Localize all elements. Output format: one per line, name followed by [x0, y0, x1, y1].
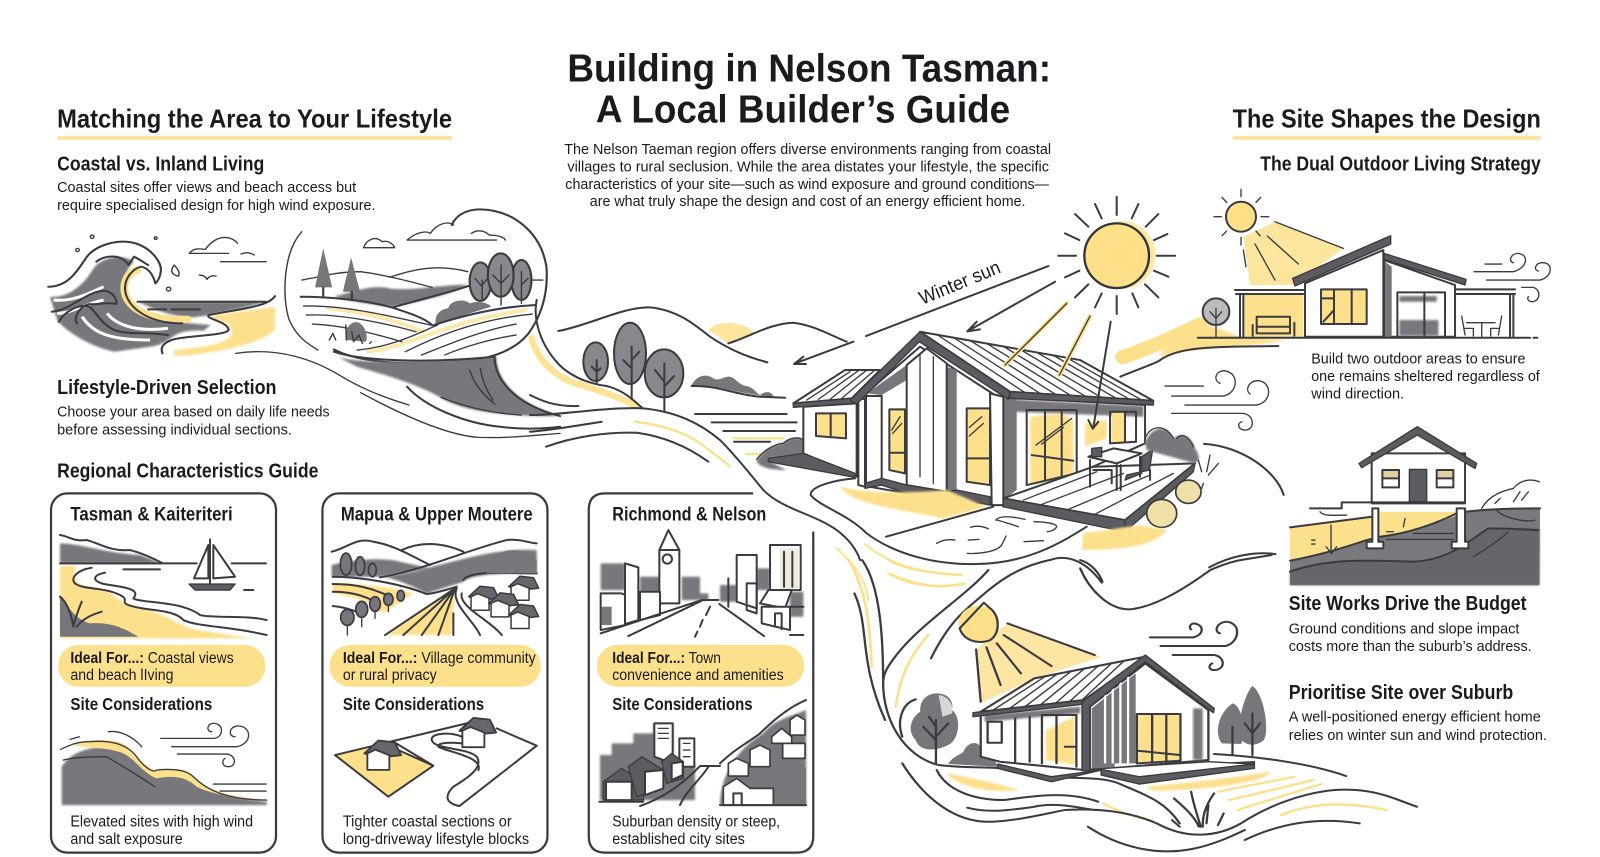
yellow band leading to dual outdoor house [1120, 325, 1284, 567]
text block: two outdoor areas: wind direction. [1310, 387, 1404, 403]
site considerations text: and salt exposure [70, 831, 183, 848]
winds near central house [1165, 371, 1269, 488]
ideal-for pill: Ideal For...: Village community [343, 650, 536, 667]
site considerations text: Elevated sites with high wind [70, 814, 253, 831]
ideal-for pill [58, 645, 265, 687]
panel: Richmond and Nelson card [589, 493, 813, 853]
text block: two outdoor areas [1310, 351, 1541, 403]
panel: Mapua and Upper Moutere card [322, 493, 547, 853]
intro text block: characteristics of your site—such as wind exposure and ground conditions— [565, 177, 1049, 193]
text block: two outdoor areas: one remains sheltered regardless of [1311, 369, 1541, 385]
site considerations text [343, 814, 529, 848]
text block: lifestyle-driven selection: before assessing individual sections. [57, 423, 292, 439]
text block: coastal vs inland: Coastal vs. Inland Living [57, 153, 264, 175]
ideal-for pill: and beach lIving [70, 667, 173, 684]
text block: prioritise site over suburb: A well-positioned energy efficient home [1289, 709, 1541, 725]
illustration: windy headland [61, 723, 267, 805]
inland hills circle [285, 209, 547, 363]
site considerations text [612, 814, 780, 848]
landscape flow lines [849, 560, 1417, 851]
sun and beam [959, 603, 1101, 703]
stilt house on sloping ground [1290, 427, 1540, 585]
subheading: dual outdoor living strategy: The Dual Outdoor Living Strategy [1260, 153, 1541, 175]
winds [1150, 622, 1237, 670]
heading: the site shapes the design: The Site Shapes the Design [1233, 106, 1541, 134]
site considerations heading: Site Considerations [612, 694, 753, 714]
illustrations: dual outdoor house and stilt house [1160, 189, 1550, 585]
illustration: lower house with sun, trees and landscape [849, 560, 1417, 851]
text block: prioritise site over suburb [1289, 682, 1547, 744]
illustration: central house with winter sun [768, 197, 1201, 532]
ideal-for pill: or rural privacy [343, 667, 437, 684]
title: Building in Nelson Tasman: [567, 48, 1051, 91]
text block: site works drive the budget: Ground conditions and slope impact [1289, 622, 1519, 638]
intro text block: The Nelson Taeman region offers diverse environments ranging from coastal [564, 142, 1051, 158]
right trees [1218, 686, 1266, 755]
text block: prioritise site over suburb: relies on winter sun and wind protection. [1289, 728, 1547, 744]
illustration: bay and sailboat [60, 535, 267, 638]
illustration: suburbs and hillside [599, 700, 806, 806]
ideal-for pill: convenience and amenities [612, 667, 784, 684]
wave [48, 235, 275, 356]
illustration: farmland and village [332, 540, 539, 635]
heading: matching the area: Matching the Area to Your Lifestyle [57, 106, 452, 134]
site considerations heading: Site Considerations [70, 694, 212, 714]
text block: lifestyle-driven selection: Lifestyle-Driven Selection [57, 377, 277, 399]
title [567, 48, 1051, 131]
illustration: section plans with driveway [335, 718, 537, 806]
title: A Local Builder’s Guide [596, 88, 1010, 131]
sun [1058, 197, 1175, 314]
front yard and path lines [811, 478, 1272, 600]
dual outdoor house [1160, 189, 1550, 360]
text block: site works drive the budget: Site Works Drive the Budget [1289, 593, 1527, 615]
panel: Tasman and Kaiteriteri card [51, 493, 276, 853]
text block: coastal vs inland: require specialised design for high wind exposure. [57, 198, 376, 214]
text block: two outdoor areas: Build two outdoor areas to ensure [1311, 351, 1526, 367]
heading: regional characteristics guide: Regional Characteristics Guide [57, 461, 318, 483]
deck [1003, 463, 1195, 532]
intro text block [564, 142, 1051, 210]
flowing landscape: hills, trees and river lines [530, 300, 860, 560]
left tree and shrub [900, 693, 998, 767]
site considerations heading: Site Considerations [343, 694, 484, 714]
card heading: Mapua & Upper Moutere [341, 503, 533, 525]
site considerations text [70, 814, 253, 848]
ideal-for pill: Ideal For...: Town [612, 650, 721, 667]
shrubs and rocks [1145, 428, 1201, 527]
house [768, 332, 1201, 532]
site considerations text: long-driveway lifestyle blocks [343, 831, 529, 848]
text block: lifestyle-driven selection: Choose your area based on daily life needs [57, 404, 330, 420]
sun rays onto roof [1005, 303, 1111, 429]
site considerations text: Suburban density or steep, [612, 814, 780, 831]
text block: site works drive the budget: costs more than the suburb’s address. [1289, 639, 1532, 655]
river swoosh [236, 352, 560, 438]
card heading: Tasman & Kaiteriteri [70, 503, 233, 525]
text block: site works drive the budget [1289, 593, 1532, 655]
winter sun label and arrows: Winter sun [916, 257, 1004, 310]
text block: coastal vs inland [57, 153, 376, 214]
winter sun label and arrows [794, 257, 1055, 364]
ideal-for pill [330, 645, 541, 687]
intro text block: villages to rural seclusion. While the area distates your lifestyle, the specific [567, 159, 1049, 175]
site considerations text: established city sites [612, 831, 745, 848]
intro text block: are what truly shape the design and cost of an energy efficient home. [590, 194, 1026, 210]
text block: lifestyle-driven selection [57, 377, 330, 439]
illustration: coastal wave and inland hills [48, 209, 560, 438]
illustration: town street [601, 530, 803, 637]
text block: coastal vs inland: Coastal sites offer views and beach access but [57, 180, 356, 196]
outdoor table and chairs [1088, 447, 1153, 490]
ideal-for pill [597, 645, 804, 687]
card heading: Richmond & Nelson [612, 503, 766, 525]
house [973, 655, 1254, 784]
site considerations text: Tighter coastal sections or [343, 814, 512, 831]
text block: prioritise site over suburb: Prioritise Site over Suburb [1289, 682, 1513, 704]
ideal-for pill: Ideal For...: Coastal views [70, 650, 234, 667]
